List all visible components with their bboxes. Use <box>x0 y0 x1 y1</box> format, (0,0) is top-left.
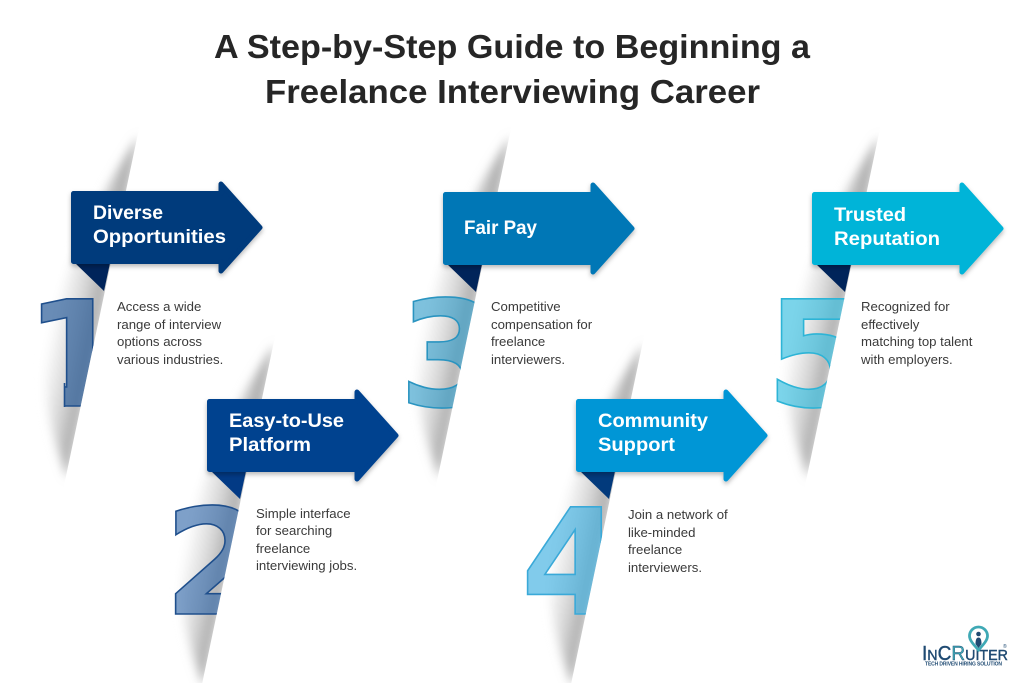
heading: Support <box>598 434 676 456</box>
description: options across <box>117 334 202 349</box>
description: Competitive <box>491 299 561 314</box>
description <box>628 507 728 575</box>
description: compensation for <box>491 317 593 332</box>
number 1 on shadow wedge: 1 <box>25 270 127 441</box>
number 2 on shadow wedge: 2 <box>164 478 266 649</box>
description: interviewing jobs. <box>256 558 357 573</box>
number 3 on shadow wedge: 3 <box>399 270 501 441</box>
description: Simple interface <box>256 506 351 521</box>
description: interviewers. <box>491 352 565 367</box>
description <box>117 299 223 367</box>
heading: Community <box>598 410 708 432</box>
description: freelance <box>628 542 682 557</box>
heading: Trusted <box>834 204 906 226</box>
arrow <box>74 184 260 271</box>
registered mark: ® <box>1003 643 1007 650</box>
wordmark: INCRUITER <box>922 643 1008 665</box>
title <box>214 28 811 110</box>
heading: Diverse <box>93 202 163 224</box>
panel: step 3 fair pay <box>399 136 632 478</box>
number 1 on shadow wedge <box>40 138 137 477</box>
heading <box>834 204 940 250</box>
description: Join a network of <box>628 507 728 522</box>
fold triangle <box>75 263 110 291</box>
description: matching top talent <box>861 334 973 349</box>
heading: Easy-to-Use <box>229 410 344 432</box>
title: Freelance Interviewing Career <box>265 73 760 110</box>
heading <box>93 202 226 248</box>
panel: step 2 easy-to-use platform <box>164 344 396 683</box>
description: interviewers. <box>628 560 702 575</box>
description: effectively <box>861 317 920 332</box>
heading: Platform <box>229 434 311 456</box>
description: freelance <box>491 334 545 349</box>
description <box>860 299 973 367</box>
number 4 on shadow wedge <box>521 344 765 683</box>
number 2 on shadow wedge <box>164 344 396 683</box>
title: A Step-by-Step Guide to Beginning a <box>214 28 811 65</box>
tagline: TECH DRIVEN HIRING SOLUTION <box>925 662 1002 668</box>
panel: step 1 diverse opportunities <box>25 136 260 478</box>
number 3 on shadow wedge <box>399 136 632 478</box>
description: freelance <box>256 541 310 556</box>
description: with employers. <box>860 352 953 367</box>
panel: step 4 community support <box>521 344 765 683</box>
heading <box>229 410 344 456</box>
heading: Reputation <box>834 228 940 250</box>
description: Recognized for <box>861 299 950 314</box>
logo <box>922 627 1008 668</box>
description: Access a wide <box>117 299 201 314</box>
heading: Fair Pay <box>464 217 537 239</box>
icon: location pin <box>970 627 988 650</box>
description: like-minded <box>628 525 695 540</box>
number 5 on shadow wedge <box>766 136 1001 478</box>
description: various industries. <box>117 352 223 367</box>
number 5 on shadow wedge: 5 <box>766 270 868 441</box>
number 4 on shadow wedge: 4 <box>521 478 623 649</box>
description <box>491 299 593 367</box>
description: range of interview <box>117 317 222 332</box>
heading <box>598 410 708 456</box>
panel: step 5 trusted reputation <box>766 136 1001 478</box>
description <box>256 506 357 573</box>
description: for searching <box>256 523 332 538</box>
heading: Opportunities <box>93 226 226 248</box>
